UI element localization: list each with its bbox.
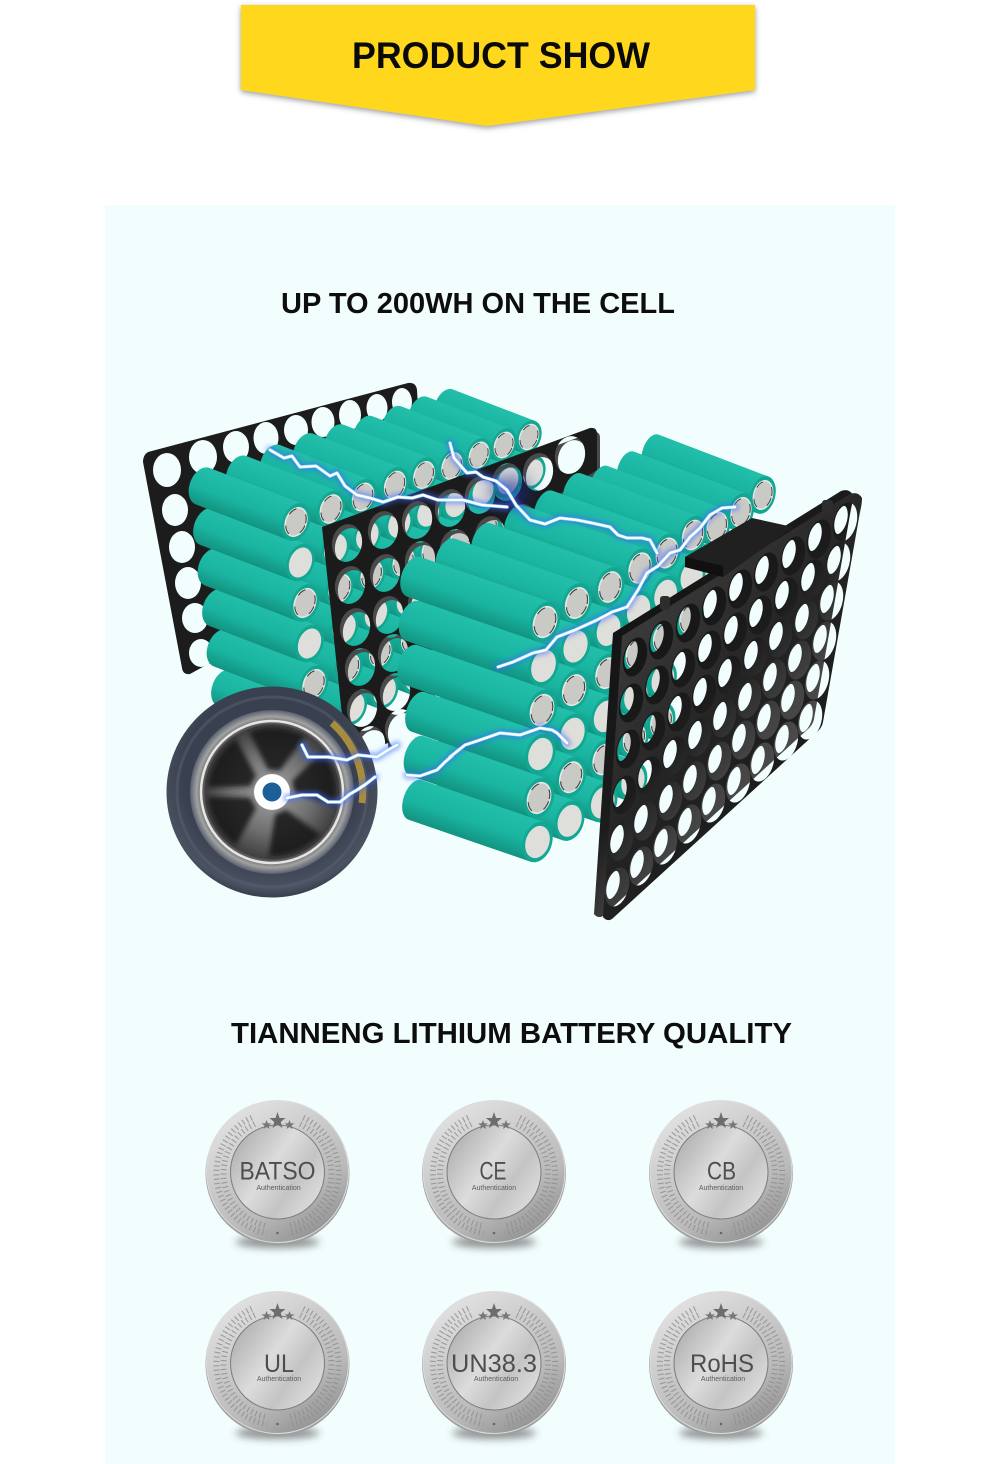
medal: UN38.3: Authentication (474, 1376, 518, 1383)
medal: CE: Authentication (472, 1185, 516, 1192)
battery holder plate: back (143, 383, 420, 674)
medal: UN38.3: UN38.3 (451, 1350, 537, 1378)
medal: RoHS (649, 1292, 793, 1439)
medal: RoHS: Authentication (701, 1376, 745, 1383)
battery holder plate: front (594, 490, 862, 920)
certification medals (206, 1100, 793, 1439)
medal: RoHS: RoHS (690, 1350, 754, 1378)
medal: BATSO: Authentication (256, 1185, 301, 1192)
medal: BATSO (206, 1100, 350, 1248)
medal: CE: CE (480, 1158, 506, 1186)
battery cells: left block (184, 385, 566, 747)
battery holder plate: middle (322, 428, 600, 766)
medal: UL (206, 1292, 350, 1439)
medal: UL: UL (264, 1350, 294, 1378)
medal: CE (422, 1100, 566, 1248)
page background panel (105, 205, 895, 1464)
heading: up to 200wh on the cell: UP TO 200WH ON THE CELL (281, 288, 675, 320)
medal: UL: Authentication (257, 1376, 301, 1383)
medal: CB: Authentication (699, 1185, 743, 1192)
lightning arcs (270, 443, 735, 802)
medal: CB (649, 1100, 793, 1248)
medal: CB: CB (707, 1158, 736, 1186)
battery cells: right block (392, 431, 780, 866)
medal: BATSO: BATSO (240, 1158, 316, 1186)
heading: tianneng lithium battery quality: TIANNENG LITHIUM BATTERY QUALITY (231, 1018, 792, 1050)
medal: UN38.3 (422, 1292, 566, 1439)
wheel (166, 686, 378, 898)
banner: product show: PRODUCT SHOW (352, 35, 650, 76)
banner: product show (241, 5, 755, 126)
illustration: battery pack exploded view (143, 383, 862, 920)
